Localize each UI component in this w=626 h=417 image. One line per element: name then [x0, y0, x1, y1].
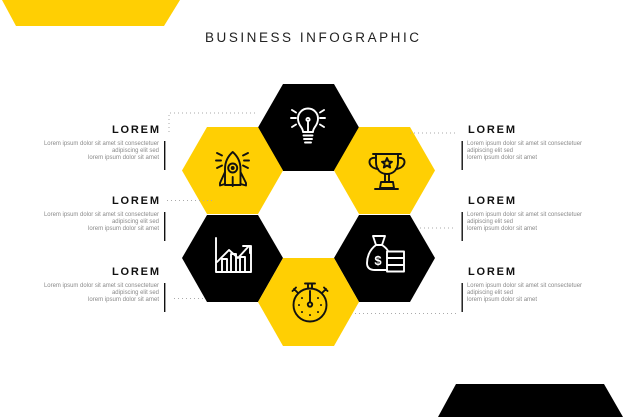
text block: lower left — [44, 266, 165, 312]
text block: middle left: Lorem ipsum dolor sit amet sit consectetuer — [44, 212, 159, 218]
text block: upper right: adipiscing elit sed — [467, 148, 513, 154]
icon: light bulb — [291, 108, 325, 142]
text block: middle right: lorem ipsum dolor sit amet — [467, 226, 537, 232]
text block: upper left: Lorem ipsum dolor sit amet sit consectetuer — [44, 141, 159, 147]
text block: lower right: lorem ipsum dolor sit amet — [467, 297, 537, 303]
hexagon: lower left black — [182, 215, 283, 302]
icon: rocket — [216, 152, 249, 186]
text block: middle right: adipiscing elit sed — [467, 219, 513, 225]
icon: stopwatch — [292, 284, 328, 322]
text block: upper right — [462, 124, 582, 170]
text block: upper left: LOREM — [112, 124, 159, 136]
text block: lower left: lorem ipsum dolor sit amet — [88, 297, 159, 303]
icon: growth chart — [216, 238, 251, 272]
text block: upper left: adipiscing elit sed — [112, 148, 159, 154]
text block: upper left — [44, 124, 165, 170]
text block: middle right — [462, 195, 582, 241]
text block: lower right: adipiscing elit sed — [467, 290, 513, 296]
text block: middle left: adipiscing elit sed — [112, 219, 159, 225]
text block: upper left: lorem ipsum dolor sit amet — [88, 155, 159, 161]
hexagon: top black — [258, 84, 359, 171]
text block: lower right — [462, 266, 582, 312]
icon: money bag with coins — [367, 236, 404, 272]
text block: lower right: Lorem ipsum dolor sit amet sit consectetuer — [467, 283, 582, 289]
top yellow banner — [2, 0, 180, 26]
text block: upper right: lorem ipsum dolor sit amet — [467, 155, 537, 161]
text block: upper right: Lorem ipsum dolor sit amet sit consectetuer — [467, 141, 582, 147]
icon: trophy — [369, 154, 405, 189]
hexagon: lower right black — [334, 215, 435, 302]
hexagon: bottom yellow — [258, 258, 359, 346]
text block: middle right: LOREM — [468, 195, 515, 207]
text block: lower left: Lorem ipsum dolor sit amet sit consectetuer — [44, 283, 159, 289]
hexagon: upper right yellow — [334, 127, 435, 214]
hexagon: upper left yellow — [182, 127, 283, 214]
connector: dotted lines — [167, 113, 457, 314]
text block: lower left: LOREM — [112, 266, 159, 278]
text block: middle left: LOREM — [112, 195, 159, 207]
text block: upper right: LOREM — [468, 124, 515, 136]
title: BUSINESS INFOGRAPHIC — [205, 30, 419, 45]
text block: lower right: LOREM — [468, 266, 515, 278]
text block: middle right: Lorem ipsum dolor sit amet sit consectetuer — [467, 212, 582, 218]
text block: lower left: adipiscing elit sed — [112, 290, 159, 296]
text block: middle left — [44, 195, 165, 241]
icon: money bag with coins: $ — [374, 253, 382, 268]
bottom black banner — [438, 384, 623, 417]
text block: middle left: lorem ipsum dolor sit amet — [88, 226, 159, 232]
